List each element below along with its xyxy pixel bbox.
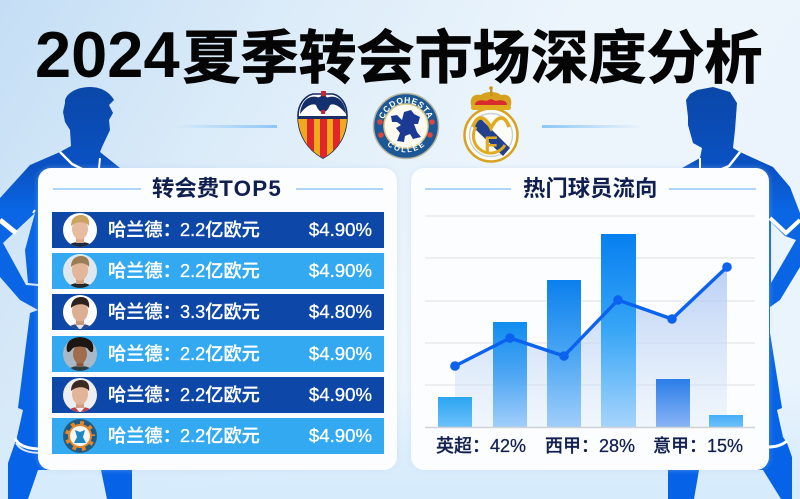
avatar 6: club badge (63, 419, 97, 453)
label: La Liga: 西甲：28% (545, 436, 635, 456)
row 1: 哈兰德： (108, 220, 181, 240)
row 1: $4.90% (309, 219, 372, 240)
icon: Chelsea crest: COLLEE (388, 142, 424, 152)
heading rule left panel right (296, 188, 383, 190)
heading: player flow: 热门球员流向 (523, 176, 657, 201)
row 6: 哈兰德： (108, 426, 181, 446)
row 2: 2.2亿欧元 (180, 261, 260, 281)
trend line (450, 262, 732, 371)
avatar 3 (63, 295, 97, 329)
icon: Chelsea crest (372, 92, 440, 160)
row 4: 2.2亿欧元 (180, 344, 260, 364)
heading rule right panel left (425, 188, 511, 190)
avatar 2 (63, 254, 97, 288)
icon: Chelsea crest: CCDOHESTA (379, 97, 432, 118)
icon: Real Madrid crest: F (484, 132, 498, 157)
row 4: 哈兰德： (108, 344, 181, 364)
panel: player flow (411, 168, 769, 470)
row 6: 2.2亿欧元 (180, 426, 260, 446)
decorative line left (175, 125, 277, 128)
row 6 (52, 418, 384, 454)
title: 2024 (35, 18, 180, 91)
row 3: $4.80% (309, 301, 372, 322)
area under line (455, 267, 727, 427)
label: Premier League: 英超：42% (436, 436, 526, 456)
avatar 4 (63, 337, 97, 371)
row 2 (52, 253, 384, 289)
row 2: $4.90% (309, 260, 372, 281)
row 5: $4.90% (309, 384, 372, 405)
heading: transfer fee top 5: 转会费TOP5 (152, 176, 282, 201)
row 1 (52, 212, 384, 248)
row 4: $4.90% (309, 342, 372, 364)
row 5: 2.2亿欧元 (180, 385, 260, 405)
row 3 (52, 294, 384, 330)
title: 夏季转会市场深度分析 (182, 11, 763, 95)
row 3: 哈兰德： (108, 302, 181, 322)
icon: Real Madrid crest (463, 86, 519, 163)
decorative line right (542, 125, 642, 128)
row 2: 哈兰德： (108, 261, 181, 281)
row 5: 哈兰德： (108, 385, 181, 405)
avatar 1 (63, 213, 97, 247)
row 4 (52, 336, 384, 372)
icon: Valencia crest (297, 91, 348, 159)
heading rule right panel right (669, 188, 756, 190)
row 5 (52, 377, 384, 413)
bars (438, 234, 743, 427)
label: Serie A: 意甲：15% (653, 436, 743, 456)
row 3: 3.3亿欧元 (180, 302, 260, 322)
avatar 5 (63, 378, 97, 412)
row 6: $4.90% (309, 425, 372, 446)
panel: transfer fee top 5 (38, 168, 397, 470)
row 1: 2.2亿欧元 (180, 220, 260, 240)
heading rule left panel left (53, 188, 141, 190)
